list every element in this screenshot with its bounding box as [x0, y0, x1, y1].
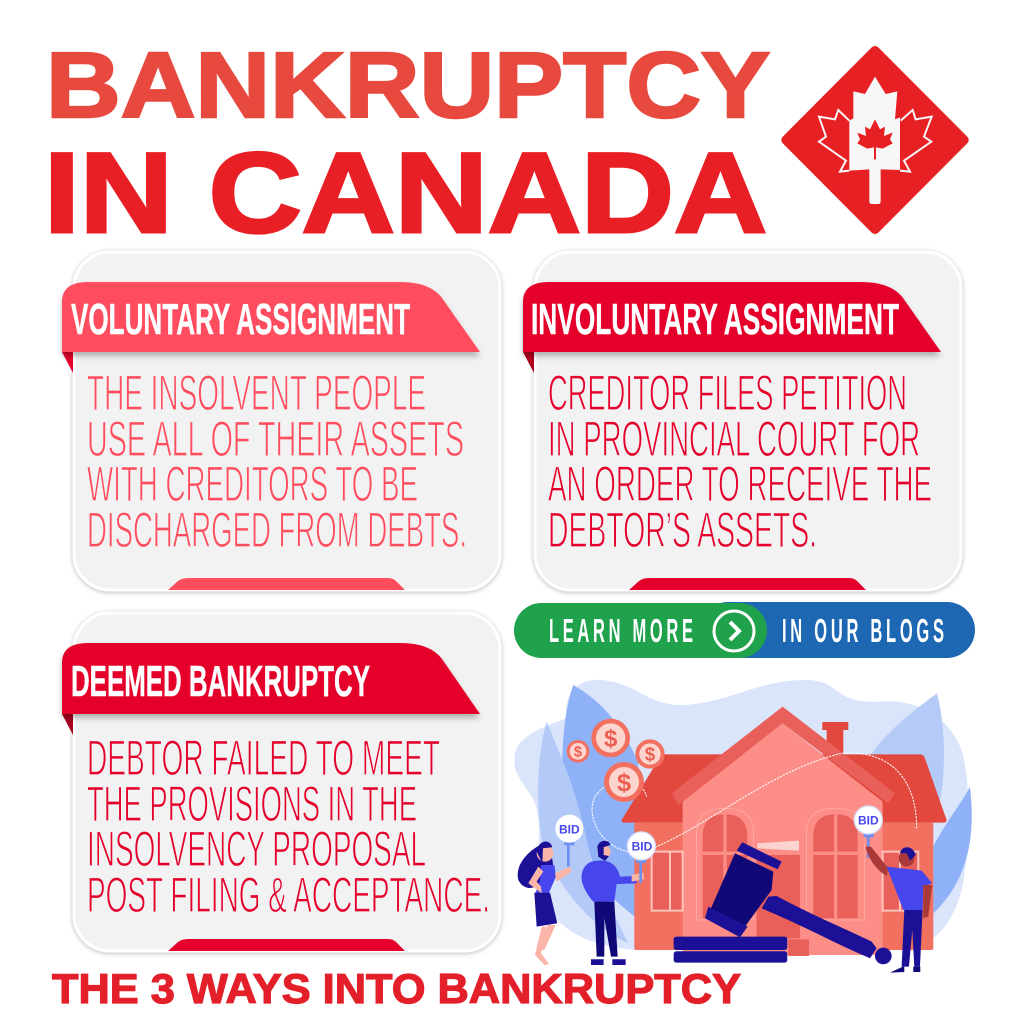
door — [757, 855, 800, 938]
heading text: VOLUNTARY ASSIGNMENT — [71, 295, 410, 344]
ribbon fold — [62, 714, 73, 735]
leaves — [562, 685, 638, 917]
ribbon heading — [62, 643, 480, 714]
coins: $ — [617, 769, 631, 797]
gavel — [674, 842, 892, 964]
man with bid sign — [854, 806, 932, 973]
dashed auction line — [592, 753, 917, 852]
coins: $ — [645, 744, 656, 765]
house — [622, 707, 947, 956]
icon: chevron circle — [714, 611, 754, 651]
body text: POST FILING & ACCEPTANCE. — [87, 867, 490, 923]
body text: USE ALL OF THEIR ASSETS — [87, 411, 464, 467]
side windows — [652, 852, 683, 911]
button: learn more in our blogs: IN OUR BLOGS — [782, 612, 944, 650]
ribbon heading — [523, 282, 941, 352]
woman: BID — [559, 822, 580, 836]
background blob — [514, 680, 969, 950]
title: BANKRUPTCY — [46, 33, 770, 137]
man with beard: BID — [632, 840, 653, 854]
bottom tab — [168, 578, 405, 590]
body text: DISCHARGED FROM DEBTS. — [87, 502, 467, 558]
ribbon fold — [62, 352, 73, 373]
panel: involuntary assignment — [523, 252, 961, 590]
coins: $ — [574, 745, 582, 761]
footer heading: THE 3 WAYS INTO BANKRUPTCY — [52, 965, 741, 1012]
panel: deemed bankruptcy — [62, 613, 500, 951]
button: learn more in our blogs: LEARN MORE — [549, 612, 693, 650]
ribbon heading — [62, 282, 480, 352]
body text: THE INSOLVENT PEOPLE — [87, 365, 426, 421]
button: learn more in our blogs — [514, 602, 975, 658]
coins: $ — [604, 726, 617, 753]
body text: THE PROVISIONS IN THE — [87, 776, 417, 832]
title: IN CANADA — [44, 130, 767, 257]
panel: voluntary assignment — [62, 252, 500, 590]
man with bid sign: BID — [858, 814, 879, 828]
body text — [87, 365, 467, 558]
body text — [87, 730, 490, 923]
man with beard — [581, 832, 655, 965]
body text — [548, 365, 932, 558]
title — [44, 33, 770, 257]
body text: INSOLVENCY PROPOSAL — [87, 821, 426, 877]
arched windows — [703, 814, 747, 918]
body text: DEBTOR FAILED TO MEET — [87, 730, 440, 786]
icon: Canadian flag diamond — [786, 51, 964, 229]
heading text: DEEMED BANKRUPTCY — [71, 657, 370, 706]
ribbon fold — [523, 352, 534, 373]
body text: DEBTOR’S ASSETS. — [548, 502, 817, 558]
bottom tab — [629, 578, 866, 590]
bottom tab — [168, 939, 405, 951]
coins — [567, 719, 665, 802]
illustration: house auction — [514, 680, 972, 973]
body text: WITH CREDITORS TO BE — [87, 456, 418, 512]
woman — [518, 815, 583, 965]
